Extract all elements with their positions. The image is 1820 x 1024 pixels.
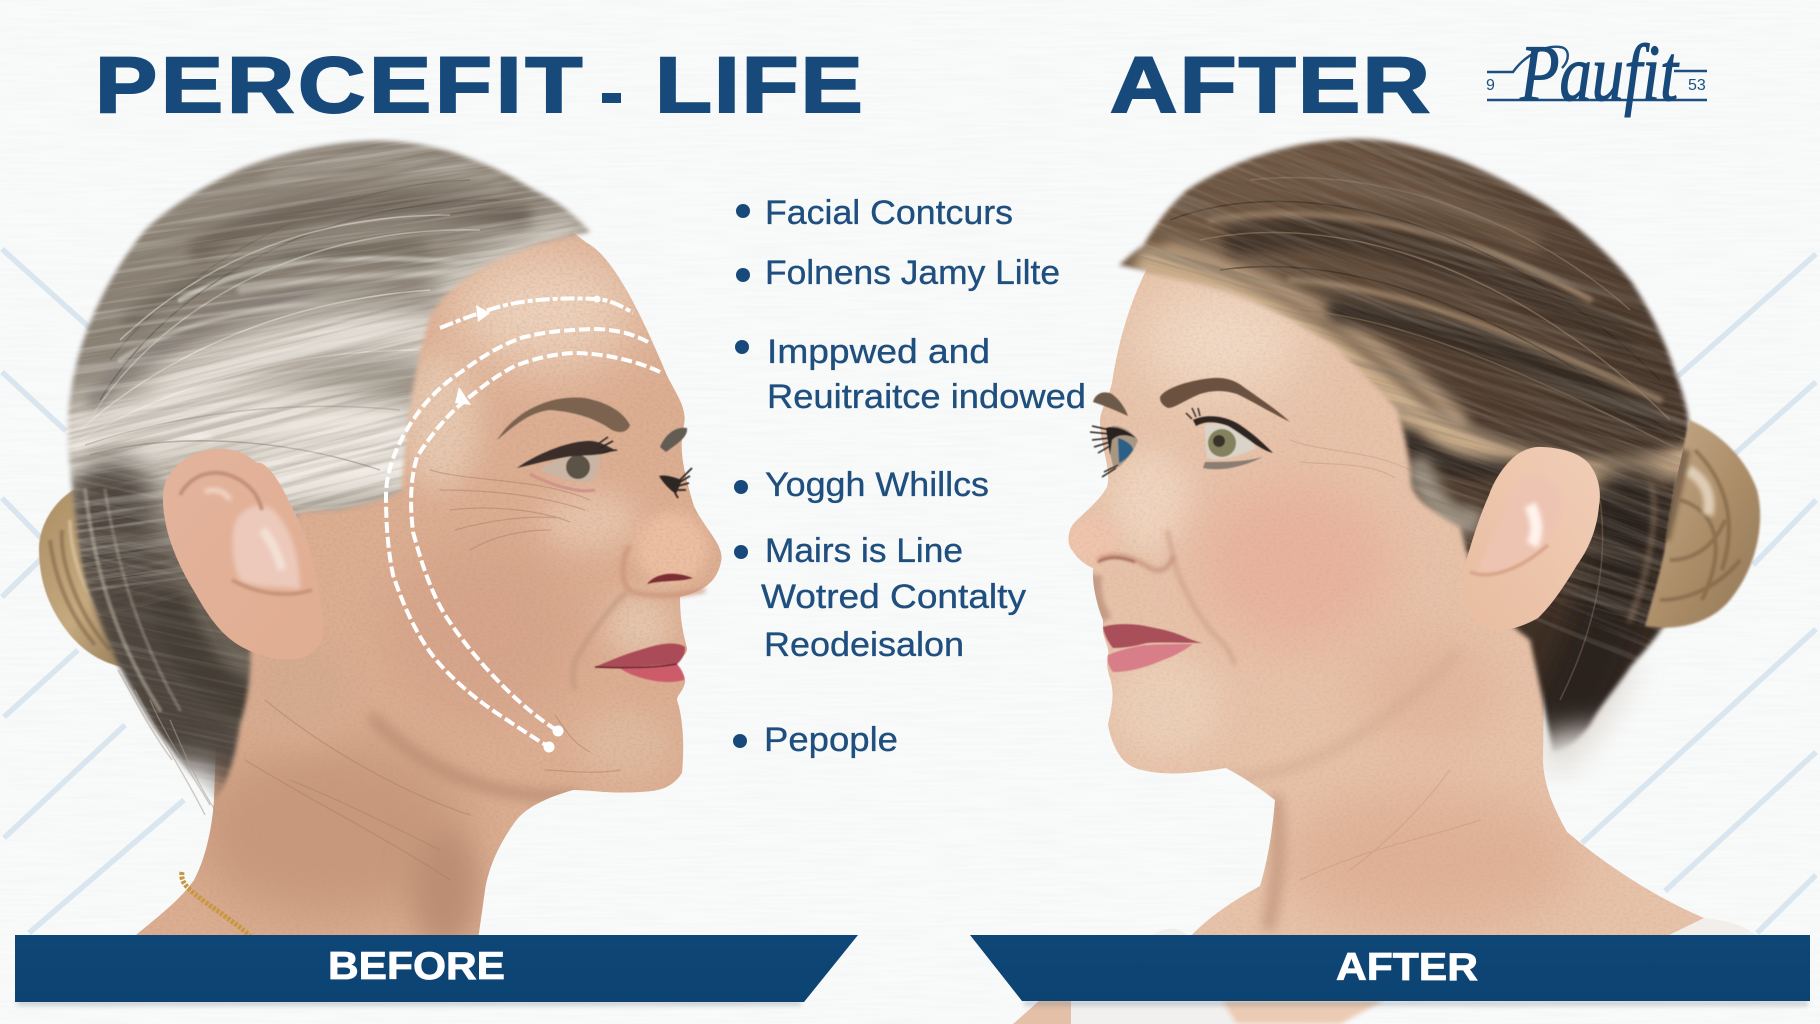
upper forehead guide — [440, 298, 633, 328]
near eye, after — [1186, 408, 1273, 469]
hair bun, after — [1645, 420, 1760, 628]
title left: LIFE — [655, 42, 863, 129]
near eyebrow, after — [1160, 378, 1290, 422]
eyebrow, before — [497, 398, 630, 440]
title right: AFTER — [1110, 42, 1430, 129]
banner shadows — [17, 1000, 1808, 1006]
eye, before — [517, 437, 617, 491]
clothing at the shoulders and under the after banner — [1013, 918, 1758, 1024]
title left: PERCEFIT — [95, 42, 582, 129]
hair wisps, after — [1540, 660, 1640, 775]
far eye lashes, before — [659, 468, 692, 498]
far eyebrow, after — [1093, 392, 1128, 416]
far eye, after — [1090, 426, 1138, 477]
skin, after — [1060, 250, 1720, 950]
neck creases and wrinkles, before — [245, 470, 620, 880]
item: Yoggh Whillcs: Yoggh Whillcs — [765, 466, 989, 504]
item: Reodeisalon: Reodeisalon — [764, 626, 964, 664]
before banner: BEFORE — [328, 945, 505, 988]
item: Wotred Contalty: Wotred Contalty — [761, 578, 1027, 616]
item: Reuitraitce indowed: Reuitraitce indowed — [767, 378, 1086, 416]
script logo: Paufit — [1519, 30, 1679, 118]
script logo: 9 — [1486, 77, 1495, 94]
curved fine strands, before — [80, 180, 500, 470]
cheek fold, before — [573, 592, 627, 690]
lips, before — [595, 644, 685, 682]
item: Imppwed and: Imppwed and — [767, 333, 990, 371]
after banner: AFTER — [1336, 946, 1478, 989]
after portrait: rejuvenated woman profile — [1068, 135, 1762, 935]
inner lift guide — [411, 353, 660, 731]
script logo: 53 — [1688, 77, 1706, 94]
nostril, before — [647, 574, 693, 584]
skin, before — [130, 200, 730, 950]
item: Mairs is Line: Mairs is Line — [765, 532, 963, 570]
ear, after — [1463, 447, 1600, 630]
neck creases, after — [1290, 440, 1480, 880]
necklace, before — [182, 872, 250, 936]
item: Pepople: Pepople — [764, 721, 898, 759]
hair mass, after — [1117, 135, 1692, 752]
left diagonal background lines — [2, 249, 184, 933]
bullet list — [733, 194, 1086, 759]
item: Facial Contcurs: Facial Contcurs — [765, 194, 1013, 232]
title left — [95, 42, 863, 129]
hair bun, before — [39, 480, 170, 668]
outer lift guide — [386, 329, 648, 747]
nose wing, after — [1098, 556, 1173, 570]
white dashed lift guide lines — [386, 296, 660, 752]
ear, before — [163, 449, 323, 660]
hair mass, before — [65, 138, 592, 800]
bullet dots — [733, 204, 750, 748]
curved fine strands, after — [1170, 178, 1680, 700]
smile line, after — [1167, 530, 1235, 665]
item: Folnens Jamy Lilte: Folnens Jamy Lilte — [765, 254, 1060, 292]
far eyebrow, before — [660, 428, 687, 452]
before banner — [15, 935, 858, 1002]
guide arrowhead and end dots — [455, 296, 600, 752]
wispy nape hair, before — [118, 670, 222, 820]
right diagonal background lines — [1582, 254, 1816, 933]
after banner — [970, 935, 1810, 1001]
before portrait: older woman profile — [38, 138, 722, 935]
nostril shade, after — [1098, 558, 1135, 562]
nose wing, before — [623, 545, 705, 596]
lips, after — [1103, 624, 1203, 672]
